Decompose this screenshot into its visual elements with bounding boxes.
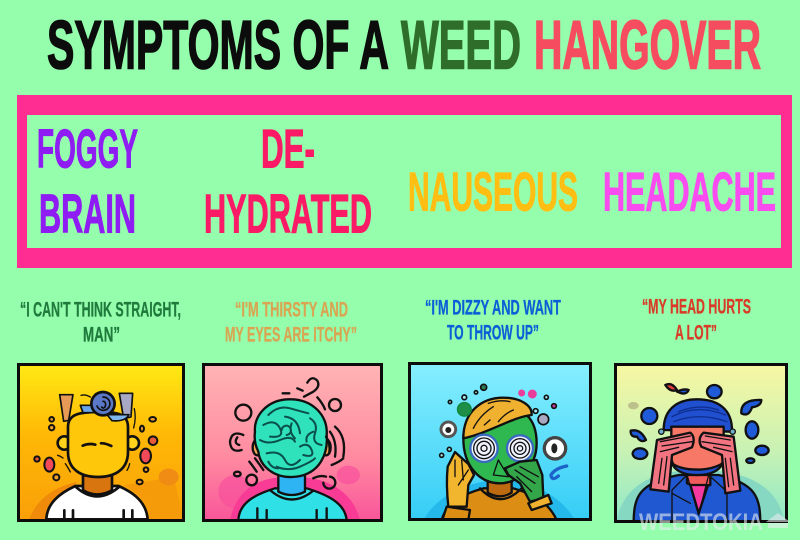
- symptom: dehydrated: DE-: [261, 118, 315, 180]
- symptom: foggy brain: [37, 118, 138, 244]
- drops: [631, 385, 769, 463]
- watermark: WEEDTOKIA: [639, 509, 763, 536]
- title: WEED: [401, 6, 521, 84]
- quote: headache: A LOT”: [675, 322, 717, 344]
- floating eyes and dots: [440, 384, 566, 459]
- dots: [34, 417, 157, 484]
- ears: [58, 436, 71, 450]
- panel: symptoms frame: [17, 95, 792, 268]
- swirls and circles: [230, 378, 344, 489]
- brain: [255, 399, 327, 477]
- hands: [447, 452, 474, 507]
- quote: foggy brain: [20, 298, 181, 346]
- hair: [463, 398, 532, 438]
- quote: headache: [642, 296, 751, 344]
- arrow swirl: [551, 466, 567, 479]
- quote: nauseous: “I'M DIZZY AND WANT: [425, 296, 561, 320]
- panel: illustration headache: [615, 364, 787, 523]
- hands: [650, 433, 694, 492]
- symptom: foggy brain: FOGGY: [37, 118, 138, 180]
- title: SYMPTOMS OF A: [47, 6, 389, 84]
- ears: [252, 440, 258, 456]
- quote: foggy brain: “I CAN'T THINK STRAIGHT,: [20, 298, 181, 322]
- symptom: dehydrated: [204, 118, 372, 244]
- symptom: dehydrated: HYDRATED: [204, 182, 372, 244]
- head: [463, 407, 537, 483]
- quote: nauseous: [425, 296, 561, 344]
- symptom: nauseous: NAUSEOUS: [408, 160, 578, 222]
- suit: [634, 475, 760, 523]
- shirt: [46, 486, 148, 519]
- quote: dehydrated: “I'M THIRSTY AND: [235, 298, 348, 322]
- panel: illustration nauseous: [409, 363, 591, 520]
- shirt: [238, 488, 347, 520]
- spiral eyes: [470, 435, 533, 462]
- panel: illustration dehydrated: [203, 364, 382, 521]
- glasses and spiral: [60, 395, 73, 421]
- shirt: [442, 488, 557, 520]
- panel: illustration foggy brain: [17, 364, 184, 521]
- quote: dehydrated: [225, 298, 357, 346]
- quote: foggy brain: MAN”: [83, 324, 120, 346]
- symptom: foggy brain: BRAIN: [39, 182, 136, 244]
- quote: dehydrated: MY EYES ARE ITCHY”: [225, 324, 357, 346]
- quote: nauseous: TO THROW UP”: [447, 322, 539, 344]
- head: [68, 412, 128, 477]
- head: [664, 399, 732, 432]
